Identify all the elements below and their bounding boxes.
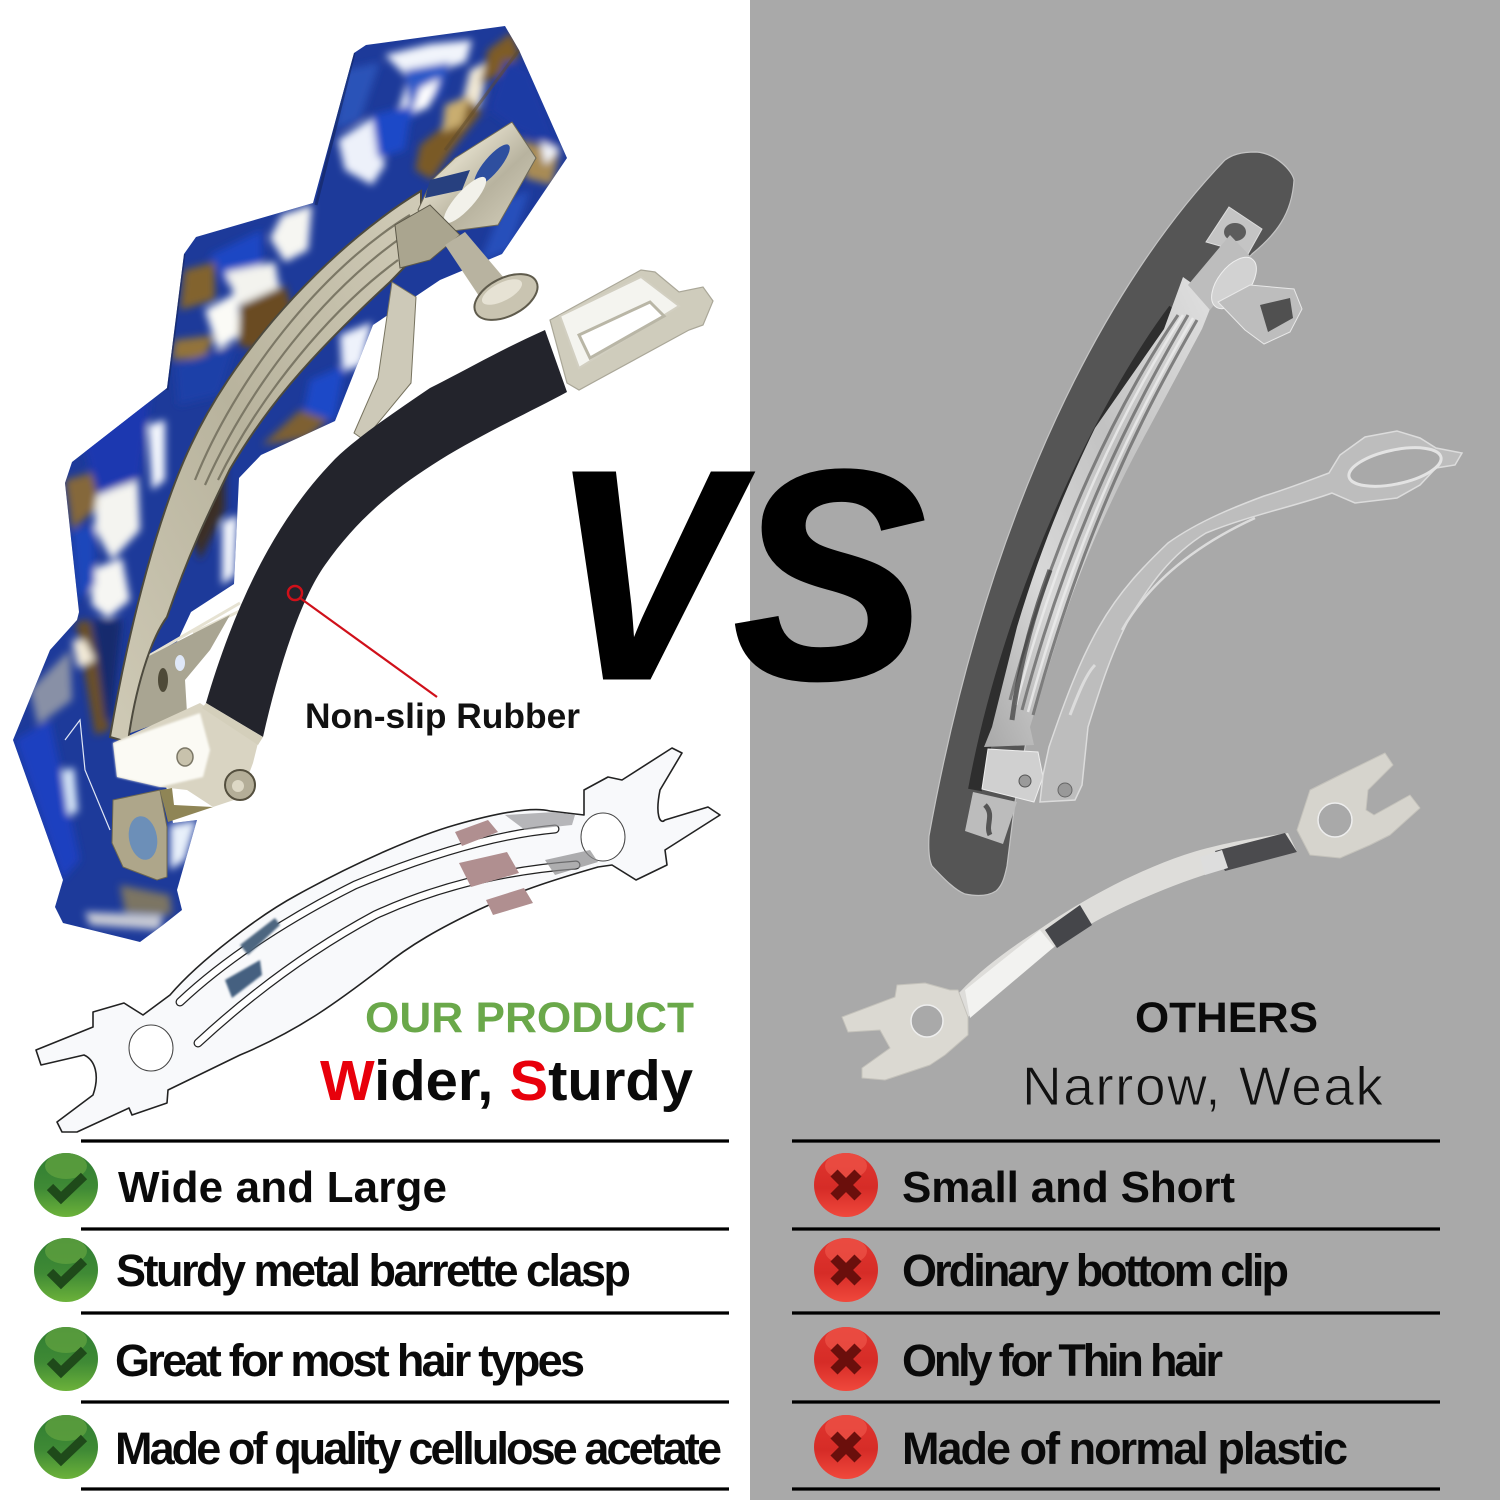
others: thin spring arm [1040,431,1462,802]
acetate zig-zag body [13,26,567,942]
lower clasp block [113,703,258,807]
list row: Made of quality cellulose acetate: Made of quality cellulose acetate [115,1423,722,1474]
top tab [1206,207,1262,254]
clasp slots [180,829,555,1002]
list row: Sturdy metal barrette clasp [34,1238,631,1302]
main metal arch [110,191,421,742]
ridges on the arch [195,215,410,485]
list row: Made of normal plastic: Made of normal plastic [902,1423,1348,1474]
right list rule lines [792,1141,1440,1489]
list row: Sturdy metal barrette clasp: Sturdy metal barrette clasp [116,1245,631,1296]
rubber strip [206,330,567,737]
background: left white panel [0,0,750,1500]
list row: Only for Thin hair [814,1327,1223,1391]
list row: Great for most hair types: Great for most hair types [115,1335,585,1386]
open silver frame [550,270,713,390]
list row: Ordinary bottom clip: Ordinary bottom clip [902,1245,1289,1296]
list row: Made of normal plastic [814,1415,1348,1479]
thin wires [147,603,242,657]
fourth piece mottling [76,620,110,735]
VS mark [551,408,927,742]
left clasp head [842,983,968,1080]
others: narrow metal clasp [842,753,1420,1080]
top tab and peg [418,122,536,232]
ribbed silver band [984,277,1214,747]
heading: Wider, Sturdy: Wider, Sturdy [320,1049,693,1113]
list row: Small and Short: Small and Short [902,1163,1235,1212]
list row: Small and Short [814,1153,1235,1217]
second piece mottling [270,205,312,262]
bottom tab [965,792,1017,844]
ferrule at rubber end [202,703,263,745]
heading: OUR PRODUCT: OUR PRODUCT [365,994,694,1042]
VS mark: V [551,408,757,741]
darker inner shadow [975,310,1175,790]
background: right gray panel [750,0,1500,1500]
clasp body [36,748,720,1132]
our product: blue tortoise barrette [13,26,567,942]
heading: OTHERS: OTHERS [1135,994,1318,1042]
lower rivet block [982,749,1043,802]
lower bracket [113,615,230,738]
top piece mottling [385,40,472,112]
ridges [1010,315,1197,715]
VS mark: S [733,409,927,742]
dark rubber backing [929,152,1294,895]
reflections [455,820,498,846]
strip reflections [1045,905,1092,948]
heading: Narrow, Weak: Narrow, Weak [1022,1055,1384,1117]
third piece mottling [95,480,140,560]
right clasp head [1297,753,1420,858]
list row: Wide and Large: Wide and Large [118,1163,447,1212]
our product: black non-slip rubber strip and clip frame [202,270,713,745]
callout: Non-slip Rubber [288,586,580,736]
list row: Only for Thin hair: Only for Thin hair [902,1335,1223,1386]
bottom tab with hole [112,790,167,880]
list row: Wide and Large [34,1153,447,1217]
narrow strip [959,833,1297,1017]
our product: wide silver metal clasp [36,748,720,1132]
others: gray barrette [929,152,1302,895]
clasp holes [581,813,625,861]
list row: Great for most hair types [34,1327,585,1391]
upper spring sliver [354,282,416,440]
list row: Ordinary bottom clip [814,1238,1289,1302]
callout: Non-slip Rubber: Non-slip Rubber [305,697,580,736]
peg and neck [1188,235,1252,310]
left list rule lines [81,1141,729,1489]
